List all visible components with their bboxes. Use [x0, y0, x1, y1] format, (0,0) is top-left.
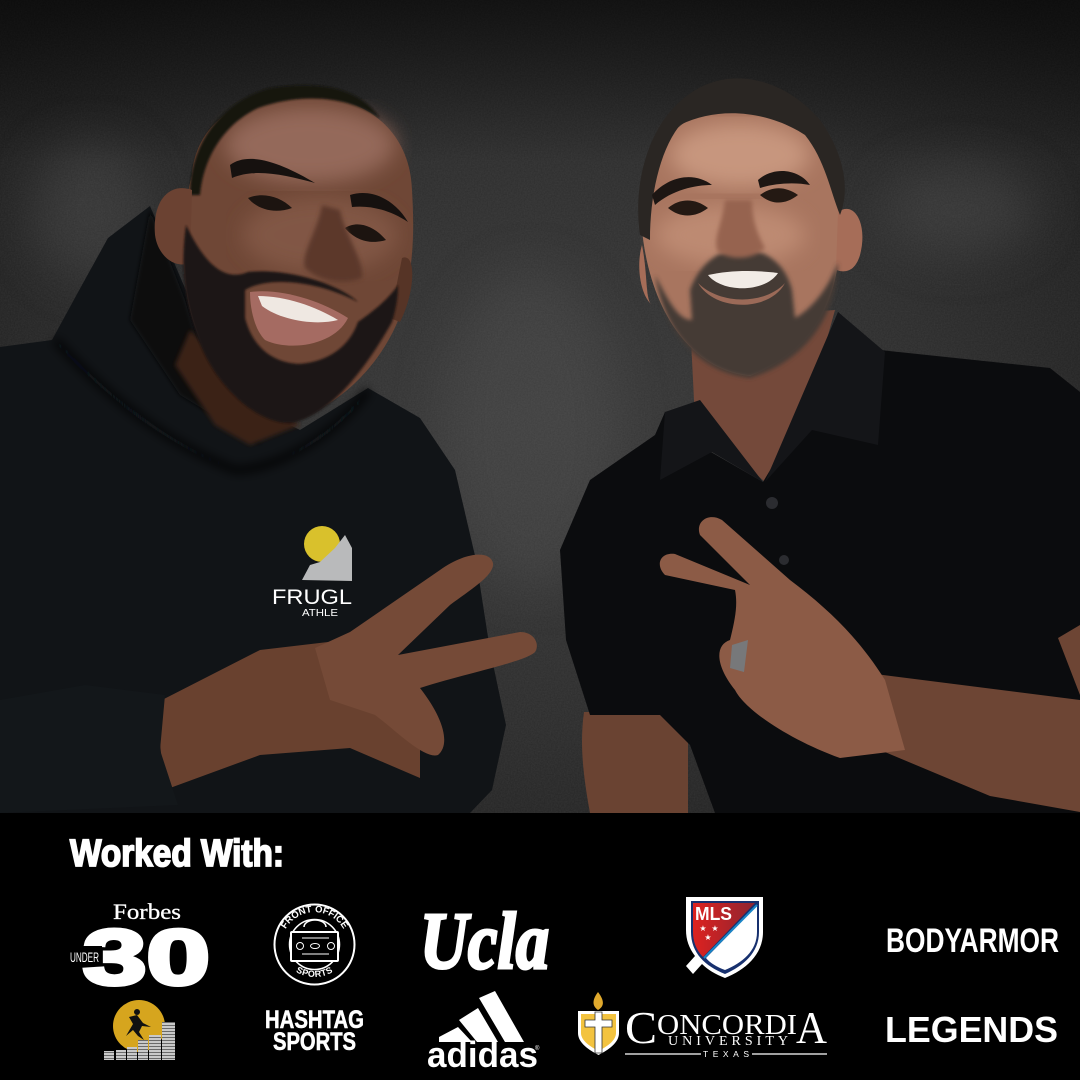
yellow sun: [304, 526, 340, 562]
Forbes wordmark: Forbes: [113, 899, 181, 924]
polo shirt: [560, 312, 1080, 813]
eyes: [248, 195, 386, 242]
hood shading: [55, 340, 368, 470]
shield stars: ★: [711, 924, 719, 933]
logo: MLS shield: [686, 897, 763, 978]
numeral 30: 30: [83, 913, 210, 1001]
shield stars: ★: [704, 933, 712, 942]
under label: UNDER: [70, 949, 99, 965]
frugal athlete chest logo: [272, 526, 352, 619]
head: [183, 93, 413, 418]
eyebrows: [230, 159, 408, 222]
logo: Hashtag Sports: [265, 1006, 364, 1056]
three bars: [439, 991, 524, 1042]
hand in a V sign: [660, 517, 905, 758]
nose: [716, 200, 765, 258]
upper right arm: [1055, 620, 1080, 700]
shirt buttons: [766, 497, 789, 565]
hoodie body: [0, 206, 506, 813]
photo: right man in black polo: [560, 78, 1080, 813]
hairline: [190, 85, 380, 195]
forehead highlight: [225, 107, 395, 183]
sun with runner: [113, 1000, 165, 1052]
eyebrows: [652, 171, 810, 205]
hashtag word: HASHTAG: [265, 1006, 364, 1034]
ear left: [155, 188, 192, 264]
left sleeve arm: [582, 712, 688, 813]
cross: [585, 1012, 612, 1053]
logo: Concordia University Texas: [578, 992, 827, 1059]
university line: UNIVERSITY: [668, 1034, 788, 1049]
neck: [175, 330, 300, 445]
ear right: [390, 257, 412, 322]
sports word: SPORTS: [273, 1028, 356, 1056]
badge top text: FRONT OFFICE: [280, 906, 348, 929]
mouth: [250, 291, 348, 346]
texas line: TEXAS: [703, 1049, 749, 1059]
logo: Adidas: [427, 991, 540, 1075]
goatee and beard: [655, 248, 838, 378]
head: [642, 105, 840, 376]
logo: Front Office Sports: [274, 904, 356, 986]
cheek highlight: [242, 197, 398, 273]
teeth: [258, 296, 338, 322]
smile teeth: [708, 271, 778, 288]
ring: [730, 640, 748, 672]
shield wordmark: MLS: [695, 904, 732, 924]
shield: [578, 1011, 619, 1055]
registered mark: ®: [535, 1045, 540, 1052]
beard: [183, 225, 398, 423]
adidas wordmark: adidas: [427, 1034, 538, 1075]
left sleeve cuff: [0, 685, 178, 813]
hair: [638, 78, 845, 240]
boombox icon: [291, 920, 338, 961]
fingers in a V: [315, 555, 537, 756]
wordmark: A: [796, 1002, 827, 1053]
bottom black band: [0, 813, 1080, 1080]
coin stacks: [104, 1022, 175, 1060]
neck: [690, 310, 835, 482]
badge bottom text: SPORTS: [296, 967, 332, 977]
coin stacks: [302, 535, 352, 581]
arm and forearm: [160, 640, 420, 788]
shield stars: [699, 924, 719, 942]
heading: Worked With: Worked With:: [70, 833, 284, 875]
wordmark: ONCORDI: [657, 1009, 797, 1041]
hood inner dark: [130, 210, 262, 445]
logo: Legends: LEGENDS: [885, 1009, 1058, 1050]
cheek highlights: [655, 205, 805, 265]
eyes: [668, 188, 798, 216]
photo: left man in black hoodie: [0, 85, 537, 813]
lip shading: [698, 283, 785, 305]
forehead highlight: [670, 123, 810, 187]
logo: UCLA script: Ucla: [420, 898, 549, 986]
chest sub-wordmark: ATHLE: [302, 608, 338, 619]
chest wordmark: FRUGL: [272, 586, 352, 609]
chalkboard background: [0, 0, 1080, 815]
shield stars: ★: [699, 924, 707, 933]
logo: Frugal Athlete: [104, 1000, 175, 1060]
polo collar: [660, 312, 885, 482]
logo: Forbes Under 30: [69, 899, 210, 1001]
nose: [304, 205, 362, 282]
raised forearm: [830, 672, 1080, 812]
wordmark: [625, 1002, 827, 1053]
flame: [594, 992, 603, 1010]
under label: [69, 946, 102, 966]
wordmark: C: [625, 1002, 657, 1053]
ears: [639, 209, 862, 305]
